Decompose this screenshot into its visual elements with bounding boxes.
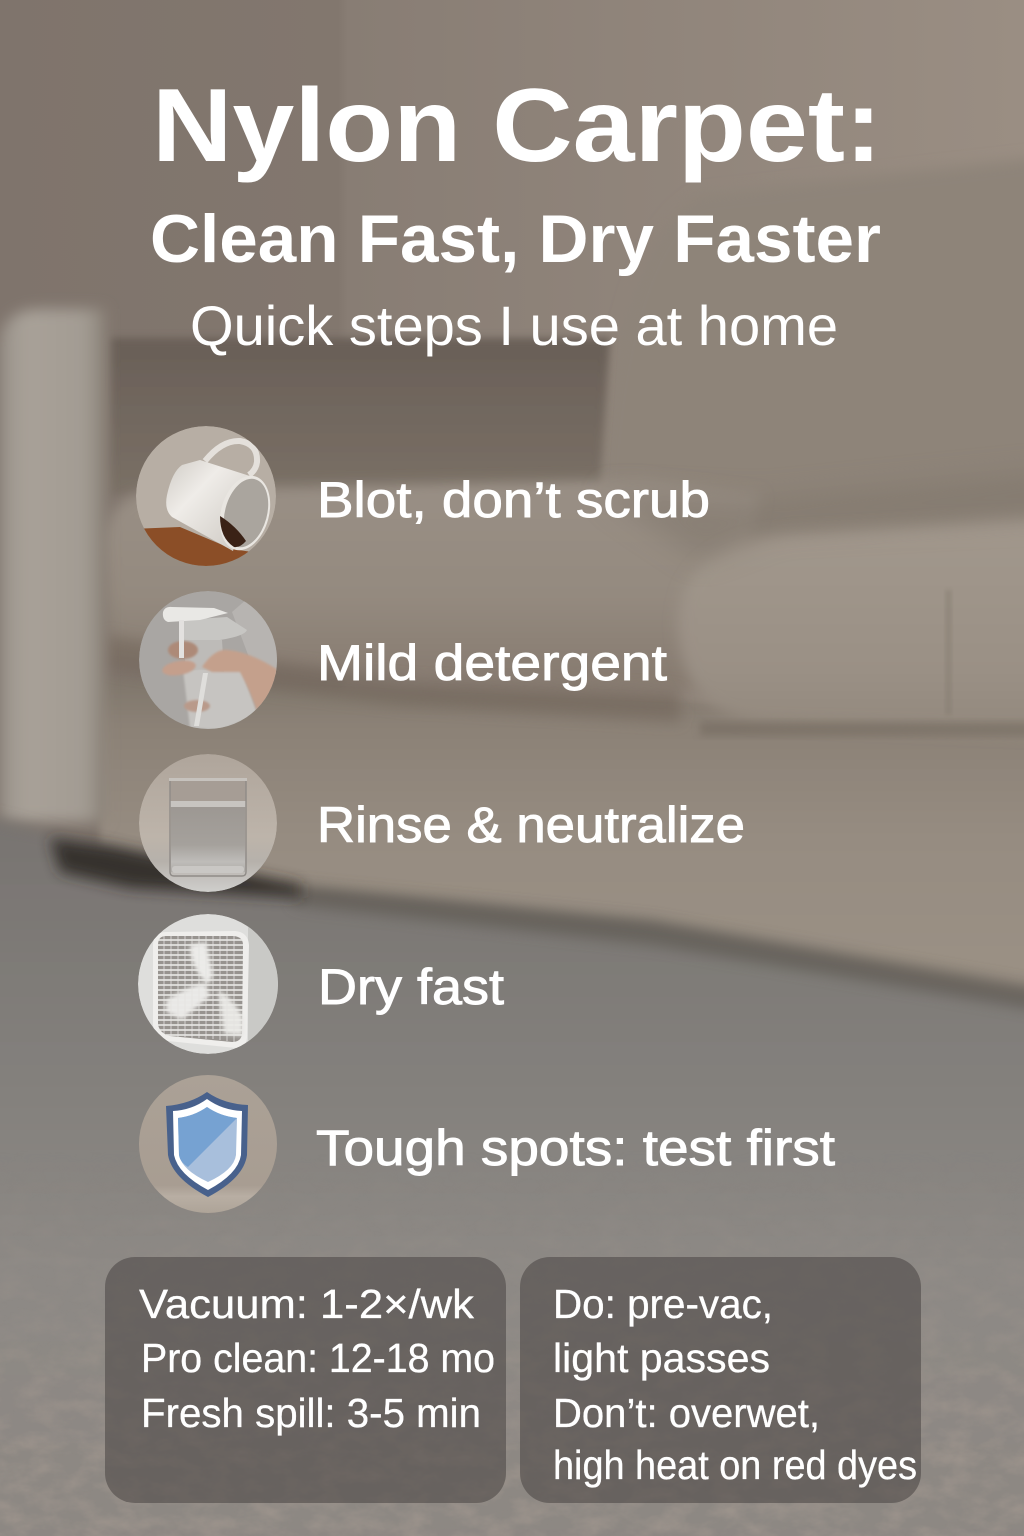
icon: shield — [139, 1075, 277, 1213]
step 3: rinse — [139, 754, 745, 892]
step 1: blot — [136, 426, 708, 566]
subtitle: Clean Fast, Dry Faster — [150, 201, 881, 277]
text: high heat: high heat on red dyes — [553, 1442, 917, 1488]
left seat cushion — [103, 480, 760, 690]
text: vacuum: Vacuum: 1-2×/wk — [139, 1281, 475, 1327]
text: don't: Don’t: overwet, — [553, 1390, 820, 1436]
dark back inset — [110, 338, 610, 495]
step 2: detergent — [139, 591, 667, 730]
sofa arm — [0, 309, 105, 822]
icon: box fan — [138, 914, 280, 1054]
sofa base — [100, 680, 1024, 1000]
tagline: Quick steps I use at home — [190, 294, 838, 357]
floor — [0, 810, 1024, 1536]
step 5: tough spots — [139, 1075, 835, 1213]
shadow on top of right cushion — [600, 470, 1024, 560]
label: Blot, don’t scrub — [317, 472, 710, 528]
label: Tough spots: test first — [316, 1120, 835, 1176]
label: Dry fast — [318, 959, 504, 1015]
text: light passes: light passes — [553, 1335, 770, 1381]
text: pro clean: Pro clean: 12-18 mo — [141, 1335, 495, 1381]
label: Mild detergent — [317, 635, 667, 691]
right seat cushion — [678, 515, 1024, 735]
carpet texture — [0, 1372, 1024, 1536]
shadow under sofa — [294, 884, 1024, 1014]
label: Rinse & neutralize — [317, 797, 745, 853]
back cushion right — [600, 155, 1024, 540]
seam shadow under seat — [105, 635, 680, 722]
panel: schedule — [105, 1257, 506, 1503]
icon: spray bottle in hand — [139, 591, 285, 730]
text: do: Do: pre-vac, — [553, 1281, 773, 1327]
panel: do and don't — [520, 1257, 921, 1503]
step 4: dry — [138, 914, 504, 1054]
icon: glass of water — [139, 754, 277, 892]
icon: coffee mug spill — [136, 426, 276, 566]
text: fresh spill: Fresh spill: 3-5 min — [141, 1390, 481, 1436]
title: Nylon Carpet: — [152, 68, 882, 184]
